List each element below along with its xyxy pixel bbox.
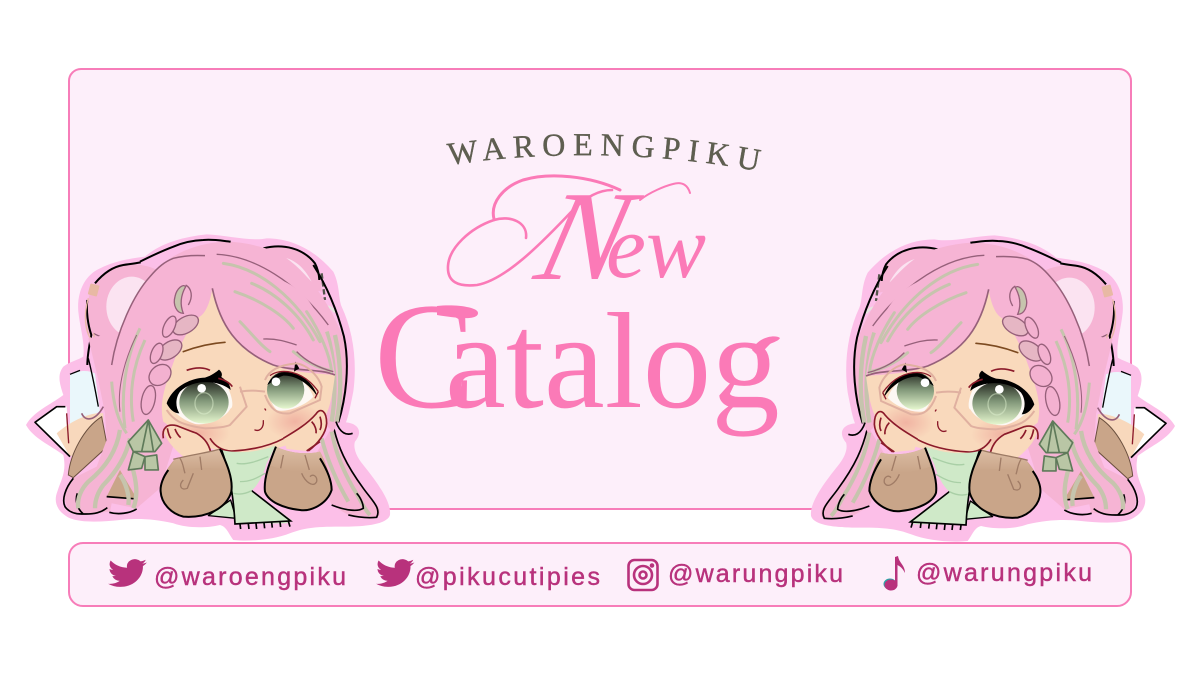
glasses xyxy=(167,363,322,428)
eye: left xyxy=(167,368,232,424)
title: Catalog xyxy=(374,272,780,440)
word New: N xyxy=(524,166,652,308)
hair curl xyxy=(336,422,353,434)
flourish on the letter C xyxy=(437,305,478,318)
face xyxy=(162,288,335,453)
word New xyxy=(524,166,706,308)
icon: instagram xyxy=(628,560,658,590)
flourish on the letter N xyxy=(448,176,690,285)
back sweater xyxy=(68,417,107,478)
handle: waroengpiku: @waroengpiku xyxy=(154,563,346,591)
word New: ew xyxy=(606,198,706,297)
word Catalog: C xyxy=(374,272,475,440)
bangs xyxy=(212,263,335,375)
icon: twitter xyxy=(376,559,414,587)
scarf xyxy=(208,446,292,529)
nose and mouth xyxy=(255,409,266,430)
handle: pikucutipies: @pikucutipies xyxy=(415,563,600,591)
head hair xyxy=(112,240,347,438)
flourish on the letter g xyxy=(752,336,780,354)
long hair xyxy=(64,325,380,518)
title: New xyxy=(448,166,706,308)
character sticker: left xyxy=(26,234,390,541)
hand: left xyxy=(163,425,212,459)
bun: left xyxy=(85,262,160,365)
sock and leg xyxy=(35,370,103,457)
braid xyxy=(139,285,202,416)
character sticker: right (mirrored) xyxy=(811,235,1175,542)
icon: twitter xyxy=(108,559,147,587)
social bar xyxy=(69,543,1131,606)
ribbon xyxy=(128,420,162,470)
word Catalog: atalog xyxy=(445,285,780,437)
bun: right xyxy=(260,246,335,312)
jaw line xyxy=(210,438,284,451)
eye: right xyxy=(267,362,318,411)
sleeve: left xyxy=(161,449,232,517)
sticker border xyxy=(26,234,390,541)
sleeve: right xyxy=(265,442,332,510)
icon: music note xyxy=(884,556,905,590)
eyebrows xyxy=(183,342,225,352)
handle: warungpiku: @warungpiku xyxy=(916,559,1092,587)
brand name on arc: WAROENGPIKU xyxy=(446,134,762,170)
handle: warungpiku: @warungpiku xyxy=(668,560,843,588)
hand: right xyxy=(283,410,327,451)
main panel xyxy=(69,69,1131,509)
